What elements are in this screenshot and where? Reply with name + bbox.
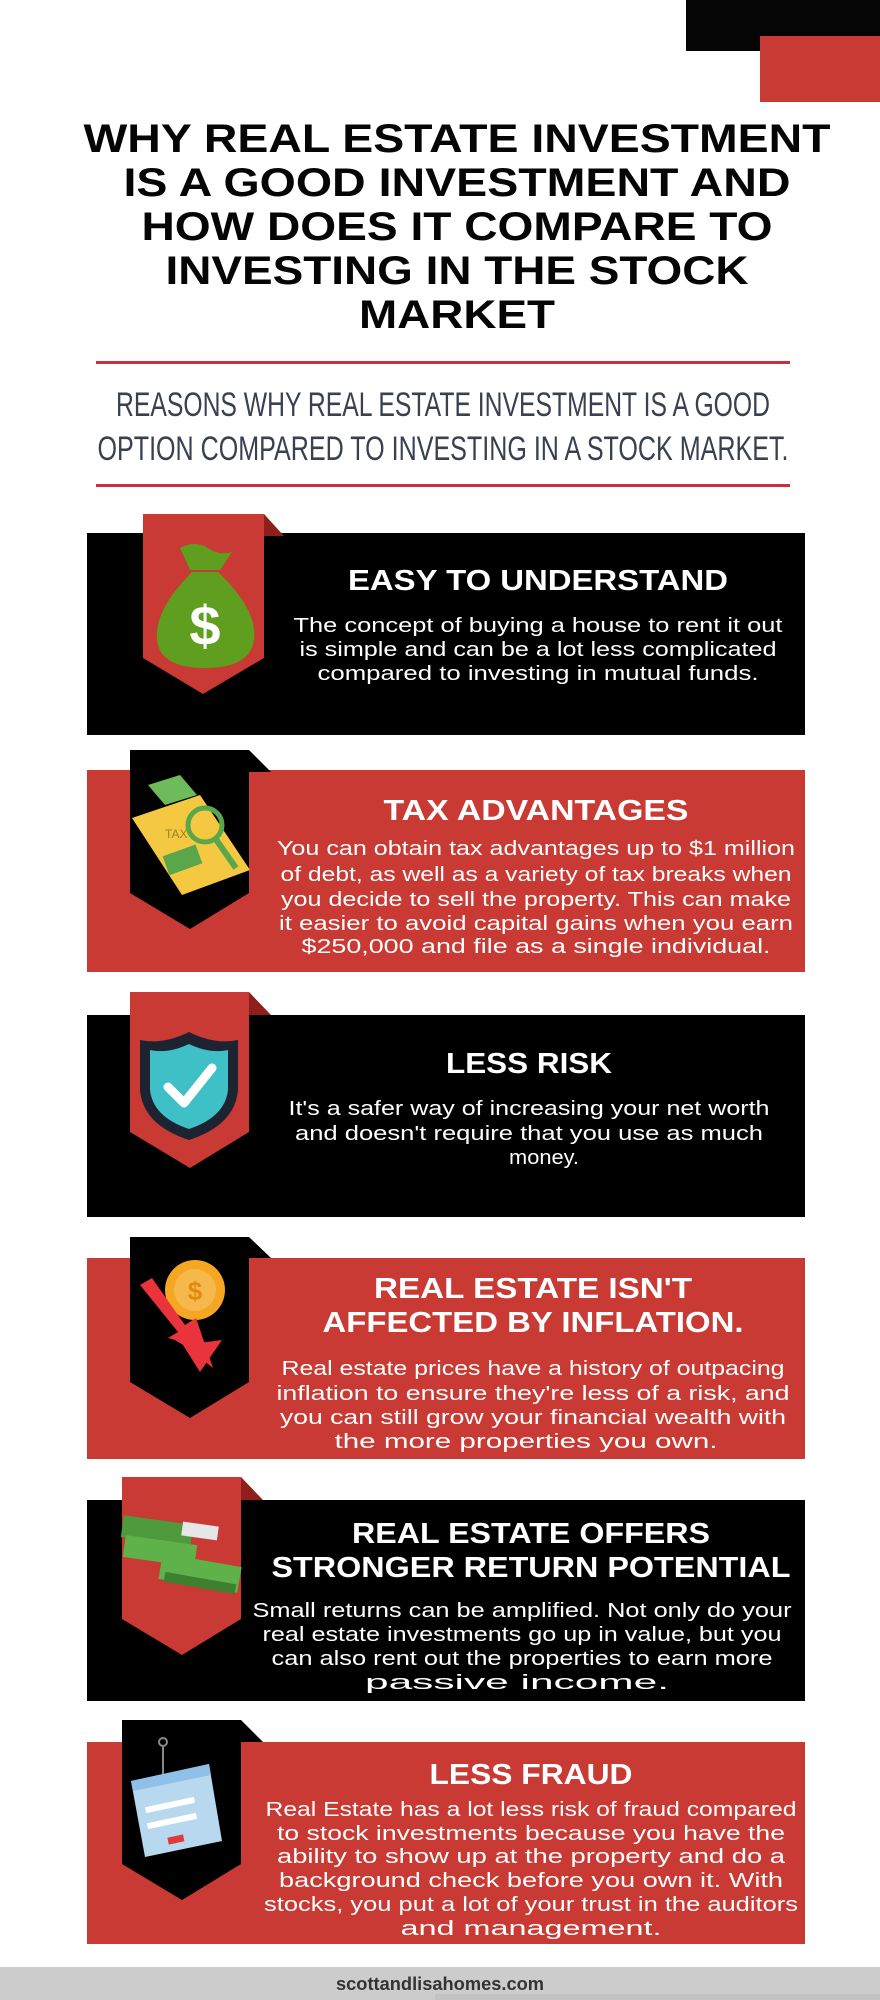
icon: money bag	[157, 544, 254, 668]
body text	[294, 615, 783, 685]
panel: less fraud	[87, 1720, 805, 1944]
icon: tax folder	[132, 775, 250, 895]
heading: STRONGER RETURN POTENTIAL	[272, 1552, 790, 1584]
body text	[288, 1098, 770, 1169]
body text	[276, 1358, 790, 1453]
body text: background check before you own it. With	[279, 1870, 783, 1892]
heading	[322, 1273, 744, 1339]
panel: return potential	[87, 1477, 805, 1701]
ribbon 3	[130, 992, 271, 1168]
icon: coin with down arrow	[140, 1260, 225, 1372]
title	[84, 117, 830, 337]
heading: LESS FRAUD	[430, 1759, 632, 1791]
body text: Real estate prices have a history of outpacing	[282, 1358, 784, 1380]
icon: phishing window	[131, 1738, 222, 1857]
body text: and management.	[400, 1918, 662, 1940]
panel: inflation	[87, 1237, 805, 1459]
ribbon 1	[143, 514, 284, 694]
body text: is simple and can be a lot less complicated	[300, 639, 776, 661]
ribbon 6	[122, 1720, 263, 1900]
icon: money bag: $	[189, 594, 221, 657]
panel: tax advantages	[87, 750, 805, 972]
title: MARKET	[359, 293, 555, 337]
body text: Real Estate has a lot less risk of fraud compared	[266, 1799, 796, 1821]
body text: and doesn't require that you use as much	[295, 1123, 763, 1145]
body text: It's a safer way of increasing your net worth	[288, 1098, 770, 1120]
panel: easy to understand	[87, 514, 805, 735]
ribbon 5	[122, 1477, 263, 1655]
body text: to stock investments because you have the	[277, 1823, 785, 1845]
heading: REAL ESTATE ISN'T	[374, 1273, 692, 1305]
body text: you can still grow your financial wealth with	[280, 1407, 786, 1429]
body text: stocks, you put a lot of your trust in the auditors	[264, 1894, 798, 1916]
body text: money.	[509, 1147, 579, 1169]
body text: You can obtain tax advantages up to $1 million	[277, 838, 795, 860]
body text: Small returns can be amplified. Not only do your	[252, 1600, 792, 1622]
ribbon 2	[130, 750, 271, 929]
body text: you decide to sell the property. This can make	[281, 889, 791, 911]
body text: inflation to ensure they're less of a risk, and	[276, 1383, 790, 1405]
icon: money stacks	[121, 1515, 242, 1594]
body text: The concept of buying a house to rent it out	[294, 615, 783, 637]
footer	[0, 1967, 880, 2000]
heading	[272, 1518, 790, 1584]
heading: LESS RISK	[446, 1048, 612, 1080]
heading: REAL ESTATE OFFERS	[352, 1518, 710, 1550]
body text: can also rent out the properties to earn more	[272, 1648, 772, 1670]
body text: it easier to avoid capital gains when you earn	[279, 913, 793, 935]
heading: TAX ADVANTAGES	[384, 795, 688, 827]
body text: compared to investing in mutual funds.	[318, 663, 758, 685]
icon: coin with down arrow: $	[188, 1276, 203, 1306]
body text: real estate investments go up in value, but you	[262, 1624, 782, 1646]
body text: $250,000 and file as a single individual.	[302, 936, 770, 958]
decoration: corner blocks	[686, 0, 880, 102]
title: INVESTING IN THE STOCK	[166, 249, 749, 293]
body text	[252, 1600, 792, 1694]
title: HOW DOES IT COMPARE TO	[142, 205, 772, 249]
title: WHY REAL ESTATE INVESTMENT	[84, 117, 830, 161]
panel: less risk	[87, 992, 805, 1217]
body text: the more properties you own.	[334, 1431, 718, 1453]
footer: scottandlisahomes.com	[336, 1974, 544, 1994]
body text: passive income.	[365, 1672, 669, 1694]
heading: EASY TO UNDERSTAND	[348, 565, 728, 597]
body text	[277, 838, 795, 958]
body text: of debt, as well as a variety of tax breaks when	[280, 864, 792, 886]
body text: ability to show up at the property and do a	[277, 1846, 786, 1868]
body text	[264, 1799, 798, 1940]
subtitle	[98, 386, 788, 468]
ribbon 4	[130, 1237, 271, 1418]
heading: AFFECTED BY INFLATION.	[322, 1307, 744, 1339]
icon: shield	[140, 1032, 238, 1140]
icon: tax folder: TAX	[165, 827, 187, 841]
title: IS A GOOD INVESTMENT AND	[124, 161, 790, 205]
